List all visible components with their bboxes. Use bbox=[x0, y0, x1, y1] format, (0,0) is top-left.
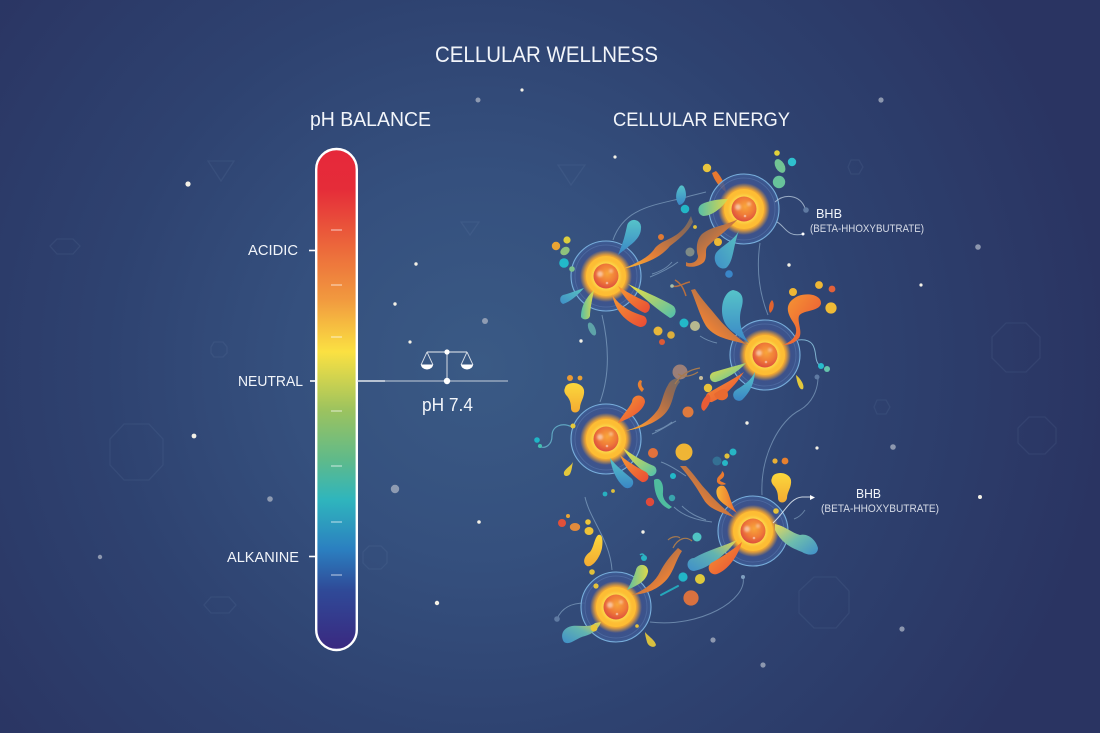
heading: pH balance: pH BALANCE bbox=[310, 109, 431, 131]
label: neutral: NEUTRAL bbox=[238, 373, 303, 390]
arrow to BHB bbox=[773, 497, 811, 523]
cell cluster: bottom left cell bbox=[554, 514, 705, 647]
cell cluster: left upper cell bbox=[552, 216, 700, 345]
BHB label top bbox=[810, 207, 924, 235]
cell cluster: right lower cell bbox=[680, 458, 818, 579]
BHB label top: (BETA-HHOXYBUTRATE) bbox=[810, 223, 924, 235]
pH scale bar bbox=[316, 149, 357, 650]
label: alkanine: ALKANINE bbox=[227, 549, 299, 566]
heading: cellular energy: CELLULAR ENERGY bbox=[613, 109, 790, 131]
connector lines between cells bbox=[557, 192, 818, 623]
callout line to BHB bbox=[775, 196, 805, 235]
title: CELLULAR WELLNESS bbox=[435, 42, 658, 67]
cell cluster: right middle cell bbox=[682, 281, 837, 418]
BHB label bottom: (BETA-HHOXYBUTRATE) bbox=[821, 503, 939, 515]
background particles bbox=[98, 88, 982, 668]
cell cluster: top centre cell bbox=[658, 150, 809, 278]
pH 7.4 marker with balance scale icon: pH 7.4 bbox=[422, 395, 473, 415]
label: acidic: ACIDIC bbox=[248, 242, 298, 259]
cell cluster: left middle cell bbox=[534, 364, 736, 509]
pH 7.4 marker with balance scale icon bbox=[357, 349, 508, 415]
BHB label bottom bbox=[821, 487, 939, 515]
BHB label bottom: BHB bbox=[856, 487, 881, 501]
faint background shapes bbox=[50, 160, 1056, 628]
BHB label top: BHB bbox=[816, 207, 842, 221]
